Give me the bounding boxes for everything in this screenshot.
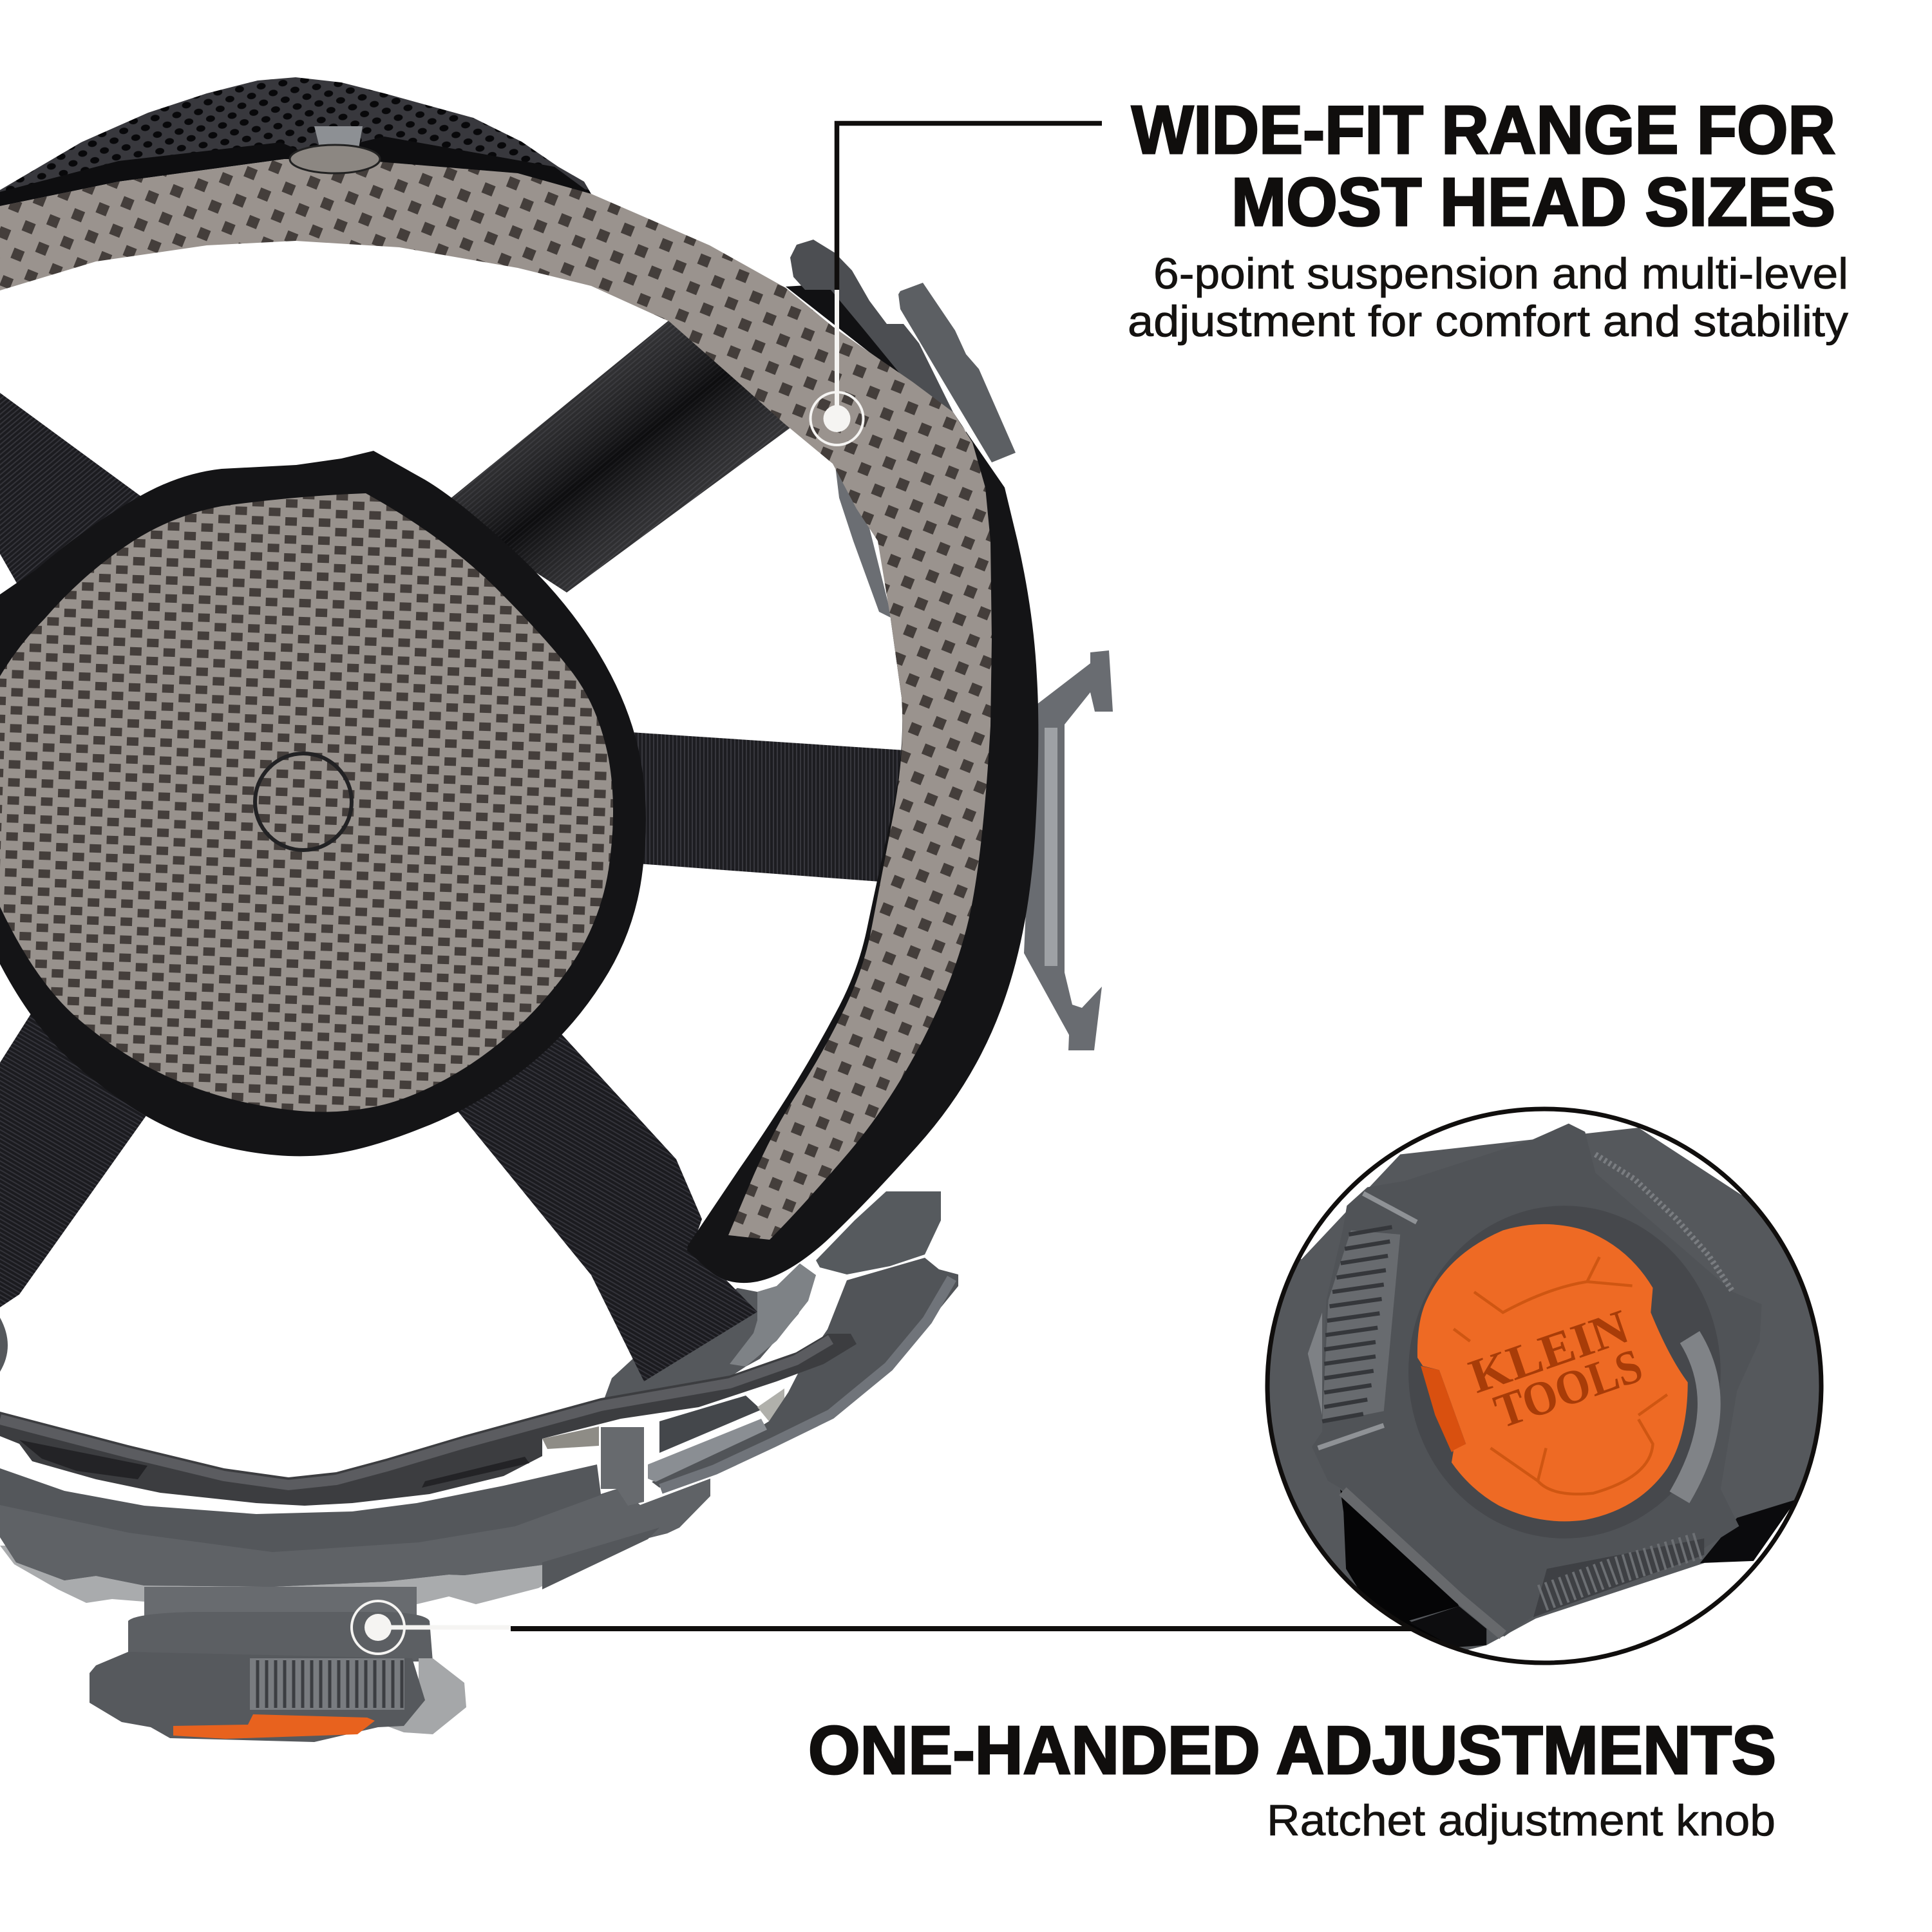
heading: wide-fit: WIDE-FIT RANGE FOR	[1132, 92, 1835, 168]
inset side highlight	[1308, 1312, 1322, 1415]
inset ring highlight	[1680, 1337, 1709, 1497]
fabric headband	[0, 159, 992, 1240]
knob ridges	[250, 1658, 404, 1710]
fabric behind band	[542, 1426, 599, 1449]
knob stem	[128, 1612, 433, 1662]
inset left ridges	[1322, 1227, 1392, 1421]
mesh binding	[0, 137, 591, 206]
upper bracket plate rear	[790, 240, 953, 412]
strap: upper left	[0, 393, 140, 599]
headband lower layer	[0, 1479, 710, 1587]
inset inner ring	[1408, 1206, 1721, 1539]
inset: knob close-up	[1224, 1109, 1840, 1670]
grommet	[290, 126, 380, 173]
main headband	[0, 1464, 710, 1587]
strap: lower right	[444, 1005, 757, 1381]
pad fabric	[0, 493, 613, 1112]
inset knob body	[1346, 1123, 1739, 1637]
slot right	[422, 1457, 529, 1488]
inset orange cap shadow	[1421, 1366, 1466, 1452]
inset lower sliver	[1409, 1606, 1486, 1647]
callout: knob line and marker	[352, 1601, 1417, 1654]
inset right shadow	[1700, 1499, 1797, 1563]
black webbing behind bracket	[786, 283, 966, 431]
knob neck	[144, 1587, 417, 1623]
callout: wide-fit line and marker	[810, 124, 1102, 445]
subtext: suspension	[1128, 249, 1848, 346]
rear arc plate	[605, 1264, 816, 1410]
knob body	[90, 1652, 425, 1742]
inset lower shadow	[1340, 1490, 1459, 1647]
slot left	[19, 1440, 147, 1479]
inset logo text: TOOLS	[1488, 1339, 1649, 1439]
side arm	[652, 1258, 958, 1488]
strap: upper right	[438, 309, 811, 592]
light rim under headband	[0, 1513, 683, 1604]
lower mechanism	[0, 1191, 958, 1742]
pivot plate	[816, 1191, 941, 1274]
subtext: suspension: adjustment for comfort and stability	[1128, 297, 1848, 346]
side arm light rim	[661, 1278, 952, 1489]
headset suspension photo	[0, 77, 1113, 1742]
subtext: suspension: 6-point suspension and multi-level	[1153, 249, 1848, 298]
inset logo text	[1467, 1310, 1641, 1426]
side clip	[1024, 650, 1113, 1050]
inset left ridge panel	[1322, 1230, 1400, 1423]
strap: lower left	[0, 1005, 161, 1307]
thin inner band	[0, 1334, 857, 1506]
lower bracket plate	[835, 466, 892, 618]
buckle	[601, 1427, 644, 1506]
small dark plate	[542, 1528, 659, 1589]
small loop at left edge	[0, 1318, 8, 1372]
inset bottom ridged section	[1533, 1539, 1704, 1617]
upper bracket plate front	[898, 283, 1016, 462]
inset logo text: KLEIN	[1463, 1300, 1636, 1404]
light bracket	[730, 1264, 816, 1367]
inset bottom ridges	[1542, 1544, 1702, 1598]
knob orange cap	[173, 1714, 375, 1739]
pad binding	[0, 451, 646, 1156]
heading: wide-fit: MOST HEAD SIZES	[1231, 164, 1835, 240]
thin band highlight	[0, 1340, 831, 1485]
inset cap embossing	[1454, 1257, 1667, 1494]
inset border	[1267, 1109, 1821, 1663]
inset knob highlights	[1318, 1193, 1417, 1448]
inset lower edge strip	[1343, 1491, 1503, 1635]
headband binding	[687, 431, 1038, 1283]
crown pad	[0, 451, 646, 1156]
heading: one-handed: ONE-HANDED ADJUSTMENTS	[808, 1712, 1776, 1788]
knob light edge	[386, 1658, 466, 1734]
pad center stitch circle	[255, 753, 352, 850]
inset background band	[1270, 1128, 1819, 1650]
inset orange cap	[1417, 1224, 1688, 1521]
strap: right	[631, 732, 914, 882]
connector bars	[648, 1419, 767, 1482]
heading: wide-fit	[1132, 92, 1835, 240]
inset top ridges	[1595, 1154, 1733, 1292]
subtext: ratchet knob: Ratchet adjustment knob	[1267, 1796, 1776, 1845]
fabric tab	[757, 1388, 784, 1421]
dark backing	[659, 1396, 761, 1453]
top mesh liner	[0, 77, 591, 206]
